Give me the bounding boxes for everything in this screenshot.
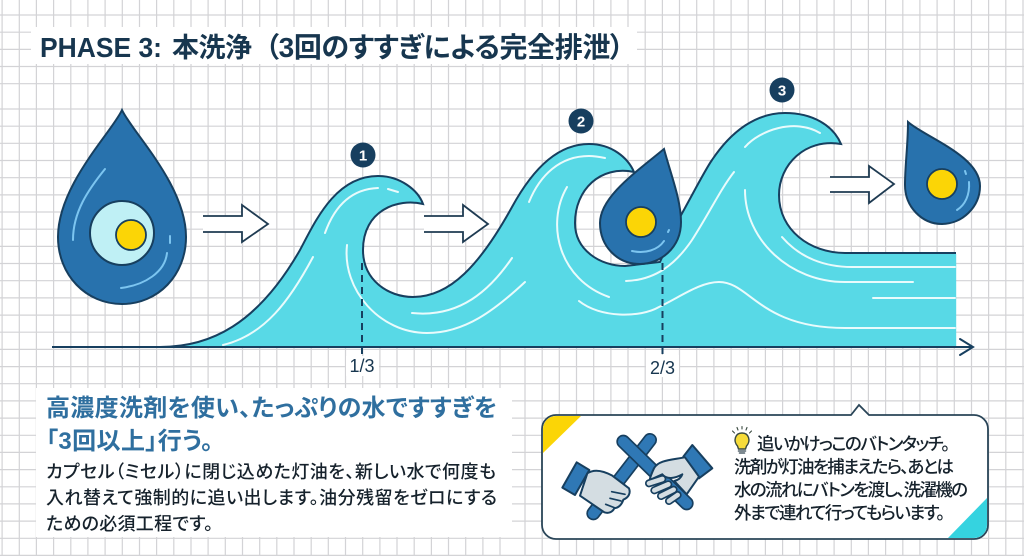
- marker: one third: [346, 263, 379, 376]
- cyan corner: [948, 498, 987, 538]
- callout text: 外まで連れて行ってもらいます。: [734, 503, 945, 523]
- callout: [542, 405, 988, 539]
- icon: initial water drop with oil capsule: [58, 110, 186, 304]
- yellow corner: [543, 416, 581, 453]
- body text: ための必須工程です。: [46, 514, 213, 534]
- badge 1: [350, 142, 376, 168]
- marker: two thirds: [646, 263, 679, 378]
- chart: three rinse waves: [160, 113, 955, 347]
- badge 3: 3: [778, 82, 786, 100]
- panel: explanation: [36, 388, 512, 537]
- badge 2: [568, 108, 594, 134]
- icon: drop inside second wave: [600, 149, 681, 264]
- callout text: 水の流れにバトンを渡し、洗濯機の: [734, 480, 968, 500]
- title: 本洗浄: [172, 33, 252, 63]
- icon: lightbulb: [732, 426, 752, 453]
- body text: 入れ替えて強制的に追い出します。油分残留をゼロにする: [46, 487, 497, 508]
- icon: baton hand-off: [562, 440, 712, 513]
- badge 3: [770, 78, 794, 102]
- title: （3回のすすぎによる完全排泄）: [265, 32, 624, 63]
- icon: final drop: [905, 122, 980, 224]
- title: [31, 27, 637, 64]
- marker: two thirds: 2/3: [650, 358, 675, 378]
- badge 1: 1: [359, 148, 367, 164]
- marker: one third: 1/3: [349, 356, 375, 376]
- body text: カプセル（ミセル）に閉じ込めた灯油を、新しい水で何度も: [46, 462, 496, 482]
- badge 2: 2: [577, 114, 585, 130]
- heading: 高濃度洗剤を使い、たっぷりの水ですすぎを: [46, 394, 497, 422]
- callout text: 洗剤が灯油を捕まえたら、あとは: [734, 457, 954, 477]
- arrow: third wave to clean drop: [830, 166, 894, 203]
- flow lines: [223, 126, 955, 345]
- arrow: drop to first wave: [203, 205, 268, 242]
- heading: [46, 394, 497, 455]
- arrow: first to second wave: [424, 205, 488, 242]
- axis: [52, 339, 973, 355]
- title: PHASE 3:: [40, 32, 162, 63]
- callout text: 追いかけっこのバトンタッチ。: [757, 434, 950, 454]
- body text: [46, 462, 497, 534]
- heading: 「3回以上」行う。: [46, 428, 213, 455]
- callout text: [734, 434, 968, 523]
